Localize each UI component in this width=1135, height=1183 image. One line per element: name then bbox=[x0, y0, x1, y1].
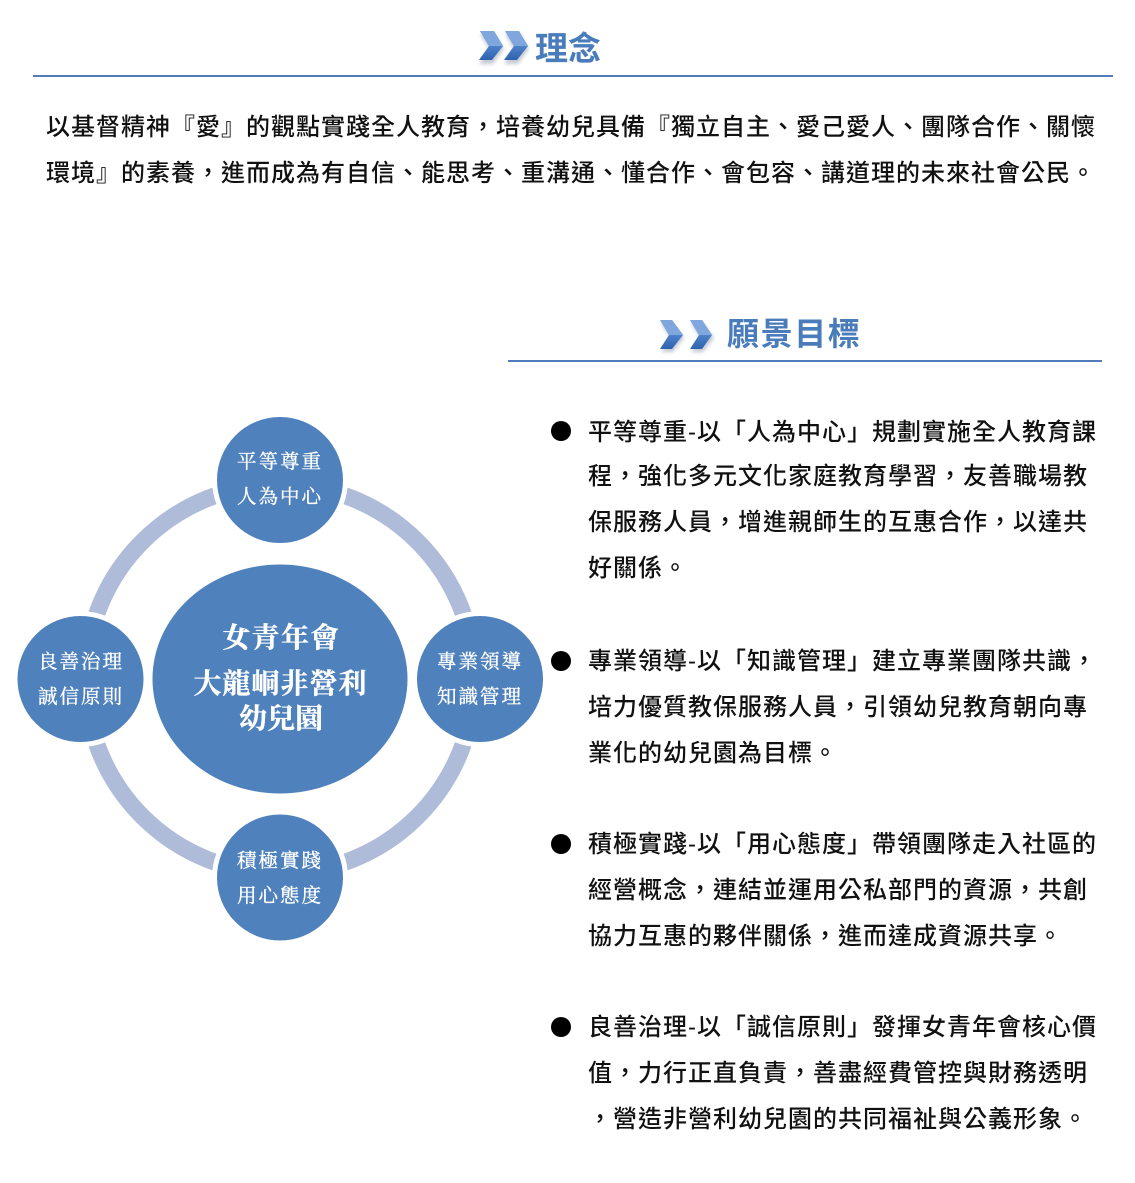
right circle: professional leadership: 專業領導 bbox=[437, 651, 523, 673]
heading: vision goals: 願景目標 bbox=[727, 316, 861, 352]
list item: professional leadership: 專業領導-以「知識管理」建立專業團隊共識， bbox=[588, 648, 1097, 675]
icon: double chevrons for vision heading bbox=[660, 320, 715, 354]
list item: active practice: 經營概念，連結並運用公私部門的資源，共創 bbox=[588, 877, 1088, 904]
list item: equality and respect: 保服務人員，增進親師生的互惠合作，以達共 bbox=[588, 509, 1088, 536]
heading: philosophy: 理念 bbox=[535, 30, 601, 67]
diagram: cycle of four values around the kindergarten bbox=[18, 417, 543, 940]
top circle: equality and respect: 人為中心 bbox=[237, 486, 323, 508]
list item: equality and respect: 好關係。 bbox=[588, 555, 688, 582]
centre circle: 大龍峒非營利 bbox=[193, 668, 368, 700]
right circle: professional leadership bbox=[414, 614, 546, 744]
list item: active practice bbox=[551, 831, 1097, 950]
list item: professional leadership bbox=[551, 648, 1097, 767]
divider: philosophy bbox=[33, 75, 1113, 77]
right circle: professional leadership: 知識管理 bbox=[437, 686, 523, 708]
centre circle bbox=[152, 564, 408, 794]
list item: good governance: 良善治理-以「誠信原則」發揮女青年會核心價 bbox=[588, 1014, 1097, 1041]
list item: professional leadership: 培力優質教保服務人員，引領幼兒教育朝向專 bbox=[588, 694, 1088, 721]
left circle: good governance: 良善治理 bbox=[38, 651, 124, 673]
list item: good governance: ，營造非營利幼兒園的共同福祉與公義形象。 bbox=[588, 1106, 1088, 1133]
top circle: equality and respect: 平等尊重 bbox=[237, 451, 323, 473]
list item: equality and respect: 程，強化多元文化家庭教育學習，友善職場教 bbox=[588, 463, 1088, 490]
list item: good governance: 值，力行正直負責，善盡經費管控與財務透明 bbox=[588, 1060, 1088, 1087]
list item: good governance bbox=[551, 1014, 1097, 1133]
list item: professional leadership: 業化的幼兒園為目標。 bbox=[588, 740, 838, 767]
list item: equality and respect bbox=[551, 419, 1097, 582]
text block: philosophy: 以基督精神『愛』的觀點實踐全人教育，培養幼兒具備『獨立自主、愛己愛人、團隊合作、關懷 bbox=[46, 114, 1096, 141]
icon: double chevrons for philosophy heading bbox=[478, 31, 530, 66]
text block: philosophy: 環境』的素養，進而成為有自信、能思考、重溝通、懂合作、會包容、講道理的未來社會公民。 bbox=[46, 160, 1096, 187]
top circle: equality and respect bbox=[214, 414, 346, 546]
divider: vision bbox=[508, 360, 1102, 362]
list item: equality and respect: 平等尊重-以「人為中心」規劃實施全人教育課 bbox=[588, 419, 1097, 446]
list item: active practice: 積極實踐-以「用心態度」帶領團隊走入社區的 bbox=[588, 831, 1097, 858]
text block: philosophy bbox=[46, 114, 1096, 187]
ring connecting the circles bbox=[86, 484, 474, 874]
bottom circle: active practice: 積極實踐 bbox=[237, 850, 323, 872]
centre circle: 女青年會 bbox=[222, 622, 340, 654]
centre circle: 幼兒園 bbox=[239, 703, 323, 735]
list item: active practice: 協力互惠的夥伴關係，進而達成資源共享。 bbox=[588, 923, 1063, 950]
left circle: good governance: 誠信原則 bbox=[38, 686, 124, 708]
bottom circle: active practice: 用心態度 bbox=[237, 885, 323, 907]
bottom circle: active practice bbox=[214, 812, 346, 943]
left circle: good governance bbox=[15, 614, 146, 744]
